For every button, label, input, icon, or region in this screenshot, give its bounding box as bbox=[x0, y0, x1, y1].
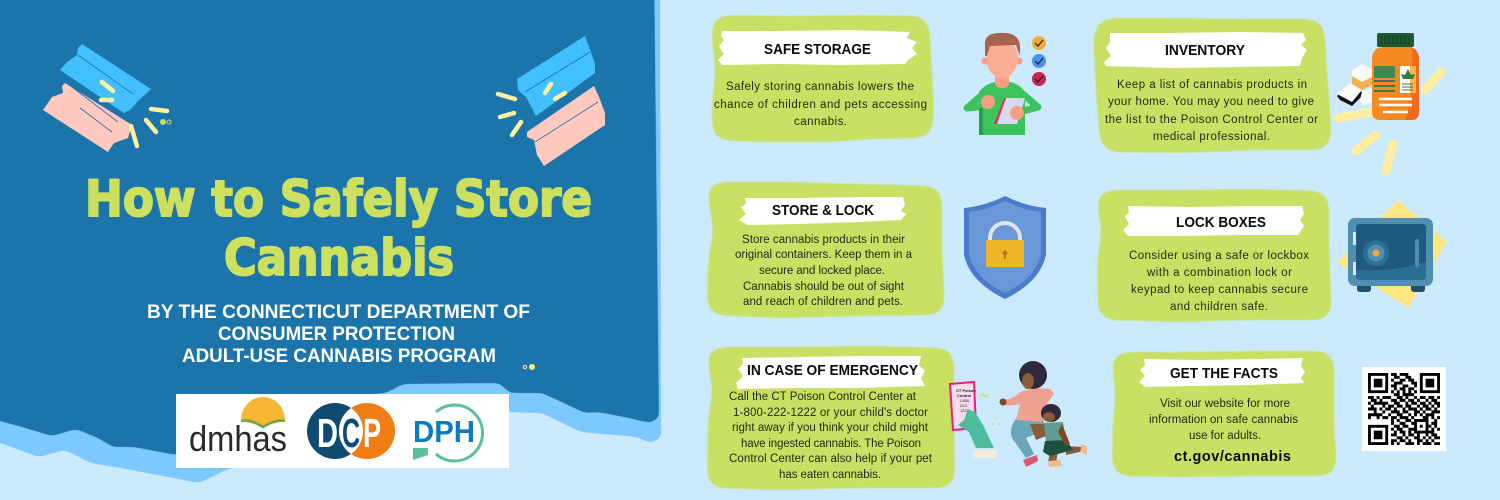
text: in case of emergency: right away if you think your child might bbox=[732, 422, 929, 434]
text: inventory: your home. You may you need to give bbox=[1108, 96, 1314, 108]
icon: mother and child running bbox=[1000, 361, 1087, 467]
logo: dmhas bbox=[189, 397, 287, 459]
logos strip bbox=[176, 394, 509, 468]
icon: safe on yellow diamond bbox=[1340, 203, 1444, 305]
subtitle: BY THE CONNECTICUT DEPARTMENT OF bbox=[147, 301, 530, 323]
subtitle: CONSUMER PROTECTION bbox=[218, 323, 455, 345]
text: store and lock bbox=[735, 234, 913, 308]
text: store and lock: secure and locked place. bbox=[759, 265, 885, 277]
text: get the facts: Visit our website for more bbox=[1160, 398, 1290, 410]
text: in case of emergency: have ingested cannabis. The Poison bbox=[741, 438, 921, 450]
left panel: blue wave background bbox=[0, 0, 661, 483]
heading: inventory bbox=[1104, 32, 1307, 68]
link: ct.gov/cannabis: ct.gov/cannabis bbox=[1174, 449, 1291, 465]
panel: get the facts bbox=[1116, 355, 1333, 473]
logo: DPH: DPH bbox=[413, 414, 475, 449]
text: lock boxes: Consider using a safe or lockbox bbox=[1129, 250, 1309, 262]
decorative brush strokes: top right bbox=[498, 36, 605, 166]
text: store and lock: Cannabis should be out of sight bbox=[743, 281, 905, 293]
text: get the facts: use for adults. bbox=[1189, 430, 1261, 442]
icon: shield with padlock bbox=[964, 196, 1046, 299]
text: safe storage: Safely storing cannabis lowers the bbox=[726, 81, 914, 93]
panel: store and lock bbox=[711, 186, 941, 314]
text: store and lock: Store cannabis products in their bbox=[742, 234, 905, 246]
text: in case of emergency: has eaten cannabis. bbox=[779, 469, 881, 481]
icon: hand holding phone: 222- bbox=[960, 403, 969, 408]
logo: dmhas: dmhas bbox=[189, 418, 287, 459]
heading: lock boxes: LOCK BOXES bbox=[1176, 214, 1266, 231]
heading: get the facts bbox=[1139, 358, 1305, 387]
subtitle bbox=[147, 301, 530, 367]
text: in case of emergency bbox=[729, 391, 933, 481]
logo: DCP bbox=[307, 403, 395, 459]
heading: store and lock: STORE & LOCK bbox=[772, 202, 874, 219]
icon: hand holding phone: Control bbox=[957, 393, 971, 398]
logo: DCP: C bbox=[342, 410, 360, 456]
heading: store and lock bbox=[739, 197, 906, 225]
icon: hand holding phone: CT Poison bbox=[956, 388, 976, 393]
title: Cannabis bbox=[224, 229, 454, 287]
panel: lock boxes bbox=[1101, 193, 1328, 318]
logo: DCP: P bbox=[363, 410, 381, 456]
panel: safe storage bbox=[714, 19, 930, 138]
text: in case of emergency: Control Center can also help if your pet bbox=[729, 453, 933, 465]
heading: lock boxes bbox=[1123, 206, 1304, 236]
logo: DPH bbox=[413, 405, 483, 461]
icon: hand holding phone: 1222 bbox=[960, 408, 970, 413]
panel: in case of emergency bbox=[711, 350, 951, 486]
icon: hand holding phone bbox=[940, 382, 1000, 458]
subtitle: ADULT-USE CANNABIS PROGRAM bbox=[182, 345, 496, 367]
text: lock boxes: with a combination lock or bbox=[1146, 267, 1292, 279]
icon: person with checklist bbox=[967, 33, 1046, 135]
text: inventory bbox=[1105, 79, 1318, 143]
heading: in case of emergency: IN CASE OF EMERGENCY bbox=[747, 362, 918, 379]
heading: safe storage: SAFE STORAGE bbox=[764, 41, 871, 58]
text: safe storage: cannabis. bbox=[794, 116, 847, 128]
text: lock boxes: keypad to keep cannabis secure bbox=[1131, 284, 1308, 296]
title: How to Safely Store bbox=[85, 170, 592, 228]
icon: medicine bottle with cubes bbox=[1337, 33, 1441, 171]
QR code bbox=[1362, 367, 1446, 451]
text: store and lock: and reach of children and pets. bbox=[743, 296, 903, 308]
logo: DCP: D bbox=[317, 410, 338, 456]
panel: inventory bbox=[1097, 22, 1327, 149]
heading: in case of emergency bbox=[736, 356, 925, 389]
text: lock boxes bbox=[1129, 250, 1309, 313]
text: in case of emergency: 1-800-222-1222 or your child's doctor bbox=[733, 407, 928, 419]
text: inventory: medical professional. bbox=[1153, 131, 1270, 143]
text: store and lock: original containers. Keep them in a bbox=[735, 249, 913, 261]
decorative brush strokes: top left bbox=[43, 44, 171, 152]
text: get the facts bbox=[1149, 398, 1298, 442]
text: get the facts: information on safe cannabis bbox=[1149, 414, 1298, 426]
title bbox=[85, 170, 592, 287]
text: lock boxes: and children safe. bbox=[1170, 301, 1268, 313]
icon: hand holding phone: 1-800- bbox=[959, 398, 971, 403]
heading: get the facts: GET THE FACTS bbox=[1170, 365, 1278, 382]
text: safe storage: chance of children and pets accessing bbox=[714, 99, 927, 111]
text: in case of emergency: Call the CT Poison Control Center at bbox=[729, 391, 917, 403]
text: safe storage bbox=[714, 81, 927, 128]
heading: inventory: INVENTORY bbox=[1165, 42, 1245, 59]
decorative dots bbox=[523, 364, 535, 370]
text: inventory: the list to the Poison Control Center or bbox=[1105, 114, 1318, 126]
text: inventory: Keep a list of cannabis products in bbox=[1117, 79, 1307, 91]
heading: safe storage bbox=[718, 30, 917, 65]
